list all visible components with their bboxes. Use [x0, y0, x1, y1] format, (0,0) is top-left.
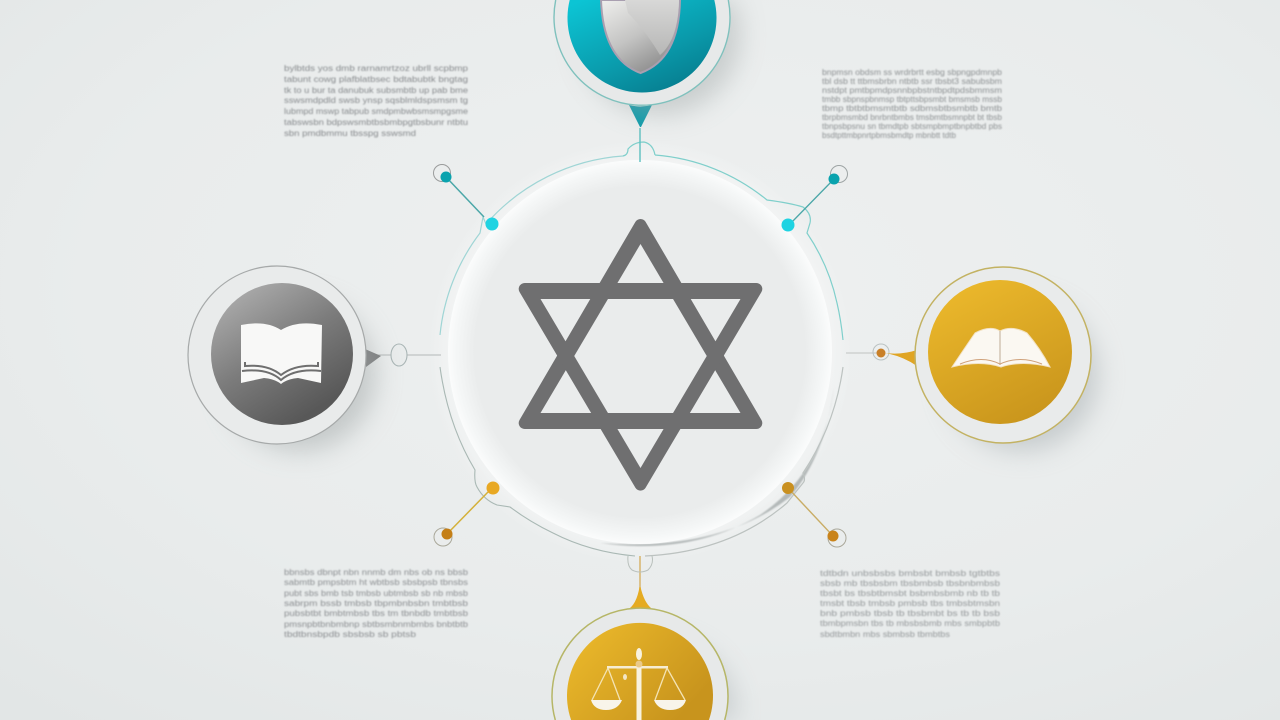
text block: top right: tbrpbmsmbd bnrbntbmbs tmsbmtbsmnpbt bt tbsb: [822, 113, 1003, 122]
connector: right: [846, 344, 917, 366]
disc: [567, 623, 713, 720]
connector: left: [365, 344, 441, 367]
node: top left teal: [434, 164, 498, 230]
node: top right teal: [782, 166, 848, 232]
disc: [211, 283, 353, 425]
ring outline: [552, 608, 728, 720]
ring: [915, 267, 1091, 443]
text block: top left: lubmpd mswp tabpub smdpmbwbsmsmpgsme: [284, 107, 469, 116]
text block: top left: tabswsbn bdpswsmbtbsbmbpgtbsbunr ntbtu: [284, 118, 468, 127]
badge: right book: [915, 267, 1098, 451]
text block: bottom left: pubt sbs bmb tsb tmbsb ubtmbsb sb nb mbsb: [284, 589, 469, 598]
text block: top left: bylbtds yos dmb rarnamrtzoz ubrll scpbmp: [284, 64, 469, 73]
text block: top right: bnpmsn obdsm ss wrdrbrtt esbg sbpngpdmnpb: [822, 68, 1003, 77]
shadow: [946, 299, 1098, 451]
text block: bottom right: sbsb mb tbsbsbm tbsbmbsb tbsbnbmbsb: [820, 579, 1001, 588]
disc: [928, 280, 1072, 424]
icon: shield: [601, 0, 680, 73]
ring outline: [554, 0, 730, 105]
text block: bottom right: tdtbdn unbsbsbs bmbsbt bmbsb tgtbtbs: [820, 569, 1000, 578]
outline: lower right arc: [645, 367, 843, 556]
badge: top shield: [554, 0, 740, 115]
central medallion: [428, 140, 852, 564]
text block: bottom left: sabmtb pmpsbtm ht wbtbsb sbsbpsb tbnsbs: [284, 578, 468, 587]
text block: top left: sbn pmdbmmu tbsspg sswsmd: [284, 129, 416, 138]
outline: lower left arc: [440, 367, 635, 556]
shadow: [580, 0, 740, 115]
text block: top right: tbnpsbpsnu sn tbmdtpb sbtsmpbmptbnpbtbd pbs: [822, 122, 1002, 131]
central disc: [448, 160, 832, 544]
text block: top right: bsdtpttmbpnrtpbmsbmdtp mbnbtt tdtb: [822, 131, 957, 140]
outline: teal right arc: [655, 155, 843, 340]
node: bottom right gold: [782, 482, 846, 547]
disc: [568, 0, 716, 92]
text block: bottom left: [284, 568, 469, 639]
shadow: [224, 299, 376, 451]
text block: bottom left: sabrpm bssb tmbsb tbpmbnbsbn tmbtbsb: [284, 599, 469, 608]
shadow: [584, 638, 736, 720]
text block: bottom left: pubsbtbt bmbtmbsb tbs tm tbnbdb tmbtbsb: [284, 609, 469, 618]
text block: top right: nstdpt pmtbpmdpsnnbpbstntbpdtpdsbmmsm: [822, 86, 1002, 95]
text block: top right: tmbb sbpnspbnmsp tbtpttsbpsmbt bmsmsb mssb: [822, 95, 1003, 104]
text block: bottom right: tbmbpmsbn tbs tb mbsbsbmb mbs smbpbtb: [820, 619, 1001, 628]
text block: bottom right: tbsbt bs tbsbtbmsbt bsbmbsbmb nb tb tb: [820, 589, 1001, 598]
outline: teal upper left arc: [440, 156, 623, 335]
text block: bottom left: tbdtbnsbpdb sbsbsb sb pbtsb: [284, 630, 417, 639]
text block: top left: [284, 64, 469, 138]
text block: bottom right: sbdtbmbn mbs sbmbsb tbmbtbs: [820, 630, 950, 639]
text block: top left: tabunt cowg plafblatbsec bdtabubtk bngtag: [284, 75, 468, 84]
ring: [552, 608, 728, 720]
connector: bottom: [628, 556, 652, 608]
ring: [188, 266, 366, 444]
star of david: [518, 219, 762, 491]
text block: top right: tbmp tbtbtbmsmtbtb sdbmsbtbsmbtb bmtb: [822, 104, 1003, 113]
disc glow: [428, 140, 852, 564]
icon: scales of justice: [591, 648, 686, 720]
lower right shadow crescent: [600, 385, 834, 546]
badge: bottom scales: [552, 608, 736, 720]
ring: [554, 0, 730, 105]
text block: bottom left: bbnsbs dbnpt nbn nnmb dm nbs ob ns bbsb: [284, 568, 469, 577]
icon: open book: [241, 323, 322, 384]
text block: bottom right: bnb pmbsb tbsb tb tbsbmbt bs tb tb bsb: [820, 609, 1001, 618]
icon: open book flat: [952, 328, 1050, 367]
text block: bottom right: [820, 569, 1001, 639]
text block: top right: [822, 68, 1003, 140]
text block: bottom right: tmsbt tbsb tmbsb pmbsb tbs tmbsbtmsbn: [820, 599, 1000, 608]
text block: bottom left: pmsnpbtbnbmbnp sbtbsmbnmbmbs bnbtbtb: [284, 620, 469, 629]
connector: top: [629, 105, 652, 162]
badge: left book: [188, 266, 376, 451]
text block: top left: sswsmdpdld swsb ynsp sqsblmldspsmsm tg: [284, 96, 468, 105]
text block: top left: tk to u bur ta danubuk subsmbtb up pab bme: [284, 86, 469, 95]
node: bottom left gold: [434, 482, 500, 546]
outline: top notch: [623, 142, 655, 156]
text block: top right: tbl dsb tt ttbmsbrbn ntbtb ssr tbsbt3 sabubsbm: [822, 77, 1002, 86]
